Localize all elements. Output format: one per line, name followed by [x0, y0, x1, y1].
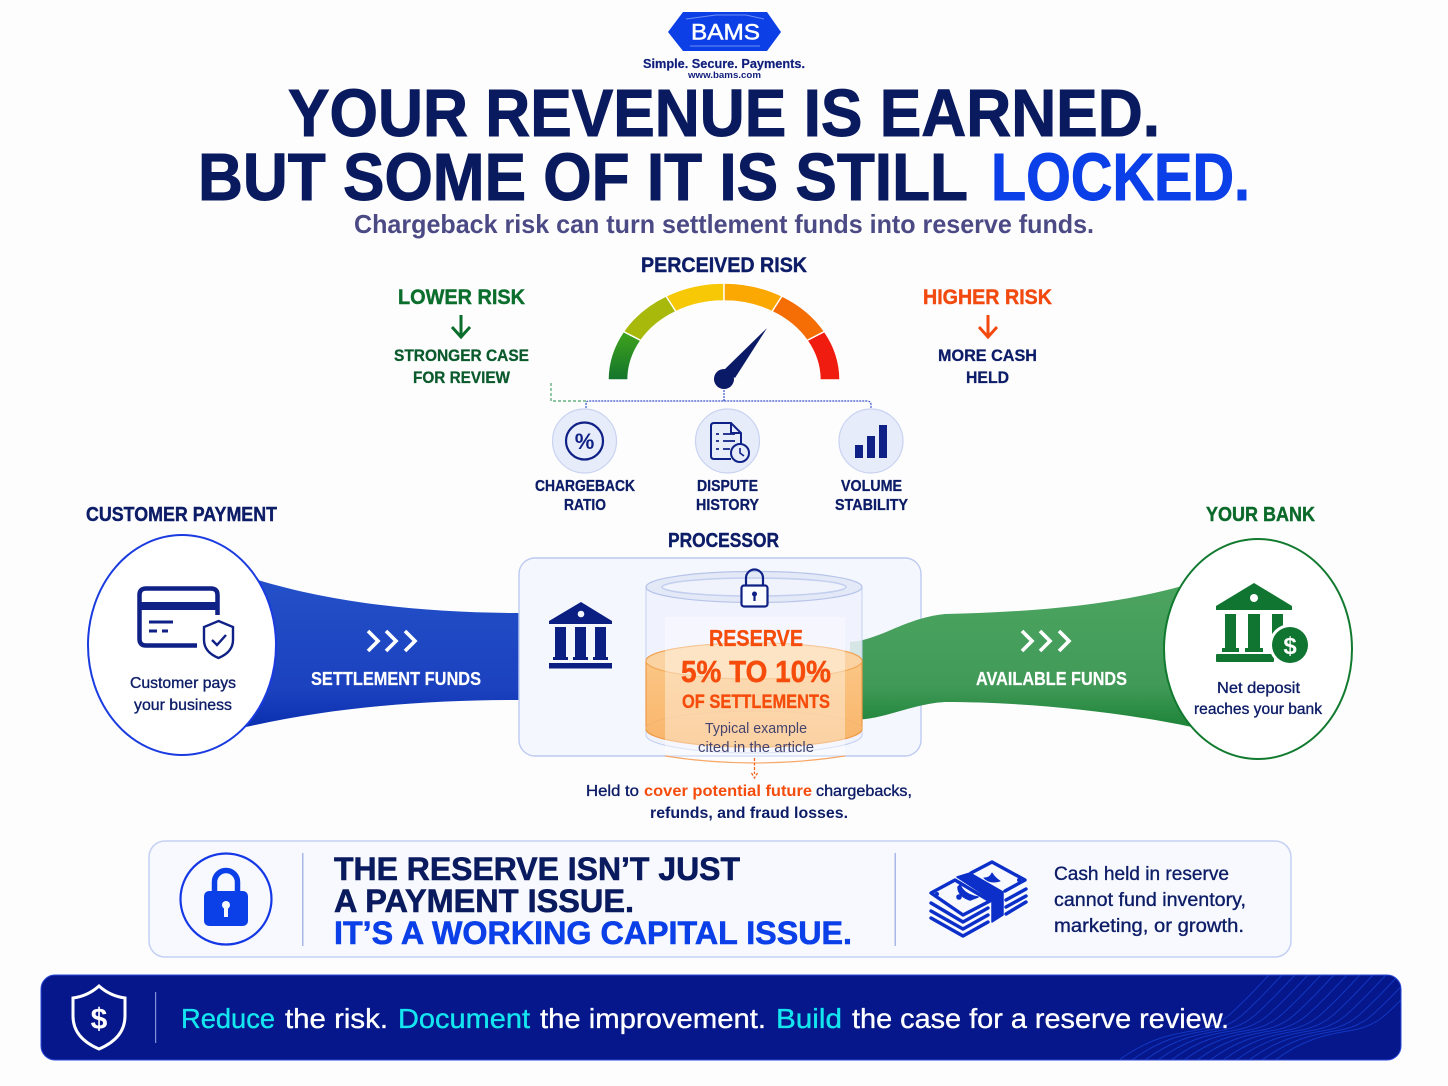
reserve text: 5% TO 10%: [681, 654, 831, 689]
reserve cylinder: [646, 570, 862, 763]
icon: shield with dollar: [73, 986, 125, 1049]
subtitle: Chargeback risk can turn settlement funds into reserve funds.: [354, 209, 1094, 239]
message heading: A PAYMENT ISSUE.: [334, 883, 634, 919]
reserve text: [681, 625, 831, 756]
banner text: the case for a reserve review.: [852, 1003, 1229, 1034]
panel: working capital message: [149, 841, 1291, 957]
banner text: Build: [776, 1003, 842, 1034]
reserve text: cited in the article: [698, 740, 814, 756]
icon: credit card with shield: [139, 588, 233, 658]
flow band: available funds: AVAILABLE FUNDS: [976, 669, 1127, 689]
node: your bank: Net deposit: [1217, 680, 1301, 697]
banner text: [181, 1003, 1229, 1034]
logo: BAMS: [643, 12, 805, 81]
heading: customer payment: CUSTOMER PAYMENT: [86, 504, 277, 526]
factor: volume stability: VOLUME: [841, 478, 902, 495]
cash note: [1054, 864, 1246, 937]
banner text: the risk.: [285, 1003, 388, 1034]
banner text: Reduce: [181, 1003, 275, 1034]
callout: lower risk: FOR REVIEW: [413, 368, 511, 387]
cylinder lid: [646, 572, 862, 602]
callout: higher risk: HELD: [966, 368, 1009, 387]
flow band: available funds: [850, 586, 1192, 727]
banner text: the improvement.: [540, 1003, 766, 1034]
title: LOCKED.: [991, 140, 1250, 215]
gauge needle: [714, 328, 767, 389]
orange reserve fill: [646, 643, 862, 747]
node: your bank: [1164, 539, 1352, 759]
title: YOUR REVENUE IS EARNED.: [288, 76, 1160, 151]
icon: processor bank: [549, 602, 612, 668]
factor: dispute history: HISTORY: [696, 497, 759, 514]
factor: volume stability: [835, 409, 908, 514]
message heading: THE RESERVE ISN’T JUST: [334, 851, 740, 887]
node: your bank: reaches your bank: [1194, 701, 1323, 718]
icon: document with clock: [711, 423, 749, 462]
node: customer payment: [88, 535, 276, 755]
banner: call to action: [41, 975, 1425, 1060]
translucent label plate: [665, 617, 845, 759]
icon: bank with dollar: $: [1283, 633, 1297, 660]
icon: bar chart: [855, 425, 887, 458]
heading: perceived risk: PERCEIVED RISK: [641, 254, 807, 277]
icon: lock in circle: [180, 854, 272, 944]
callout: higher risk: HIGHER RISK: [923, 286, 1052, 309]
reserve text: RESERVE: [709, 625, 803, 651]
node: customer payment: your business: [134, 697, 232, 714]
callout: higher risk: [923, 286, 1052, 387]
factor: volume stability: STABILITY: [835, 497, 908, 514]
heading: your bank: YOUR BANK: [1206, 504, 1315, 526]
message heading: [334, 851, 852, 951]
connector lines: [551, 381, 871, 408]
reserve note: refunds, and fraud losses.: [650, 805, 848, 822]
banner text: Document: [398, 1003, 530, 1034]
icon: percent: %: [575, 429, 594, 454]
reserve text: Typical example: [705, 721, 807, 737]
callout: lower risk: [394, 286, 529, 387]
cash note: marketing, or growth.: [1054, 916, 1244, 937]
callout: lower risk: LOWER RISK: [398, 286, 525, 309]
title: BUT SOME OF IT IS STILL: [198, 140, 968, 215]
flow band: settlement funds: SETTLEMENT FUNDS: [311, 669, 481, 689]
glass body: [646, 587, 862, 753]
panel: processor: PROCESSOR: [668, 530, 779, 552]
arrow: lower risk: [452, 315, 470, 337]
chevrons: [1022, 631, 1069, 651]
callout: lower risk: STRONGER CASE: [394, 346, 529, 365]
risk gauge: [608, 283, 840, 389]
icon: shield with dollar: $: [91, 1003, 108, 1036]
title: [198, 76, 1250, 215]
message heading: IT’S A WORKING CAPITAL ISSUE.: [334, 915, 852, 951]
flow band: settlement funds: [246, 580, 520, 727]
logo: BAMS: BAMS: [691, 20, 760, 44]
icon: bank with dollar: [1216, 583, 1311, 666]
node: customer payment: Customer pays: [130, 675, 236, 692]
cash note: cannot fund inventory,: [1054, 890, 1246, 911]
factor: chargeback ratio: CHARGEBACK: [535, 478, 635, 495]
reserve note: Held to: [586, 783, 639, 800]
reserve note: chargebacks,: [816, 783, 912, 800]
panel: processor: [519, 530, 921, 756]
logo: BAMS: www.bams.com: [687, 70, 761, 81]
chevrons: [368, 631, 415, 651]
icon: padlock: [742, 570, 768, 606]
callout: higher risk: MORE CASH: [938, 346, 1037, 365]
reserve note: [586, 783, 912, 822]
factor: dispute history: DISPUTE: [697, 478, 758, 495]
logo: BAMS: Simple. Secure. Payments.: [643, 56, 805, 71]
reserve text: OF SETTLEMENTS: [682, 692, 830, 713]
factor: chargeback ratio: RATIO: [564, 497, 606, 514]
reserve note: cover potential future: [644, 783, 812, 800]
factor: chargeback ratio: [535, 409, 635, 514]
arrow: reserve to note: [752, 758, 758, 778]
cash note: Cash held in reserve: [1054, 864, 1229, 885]
icon: stack of cash: [931, 862, 1026, 936]
arrow: higher risk: [979, 315, 997, 337]
factor: dispute history: [696, 409, 760, 514]
